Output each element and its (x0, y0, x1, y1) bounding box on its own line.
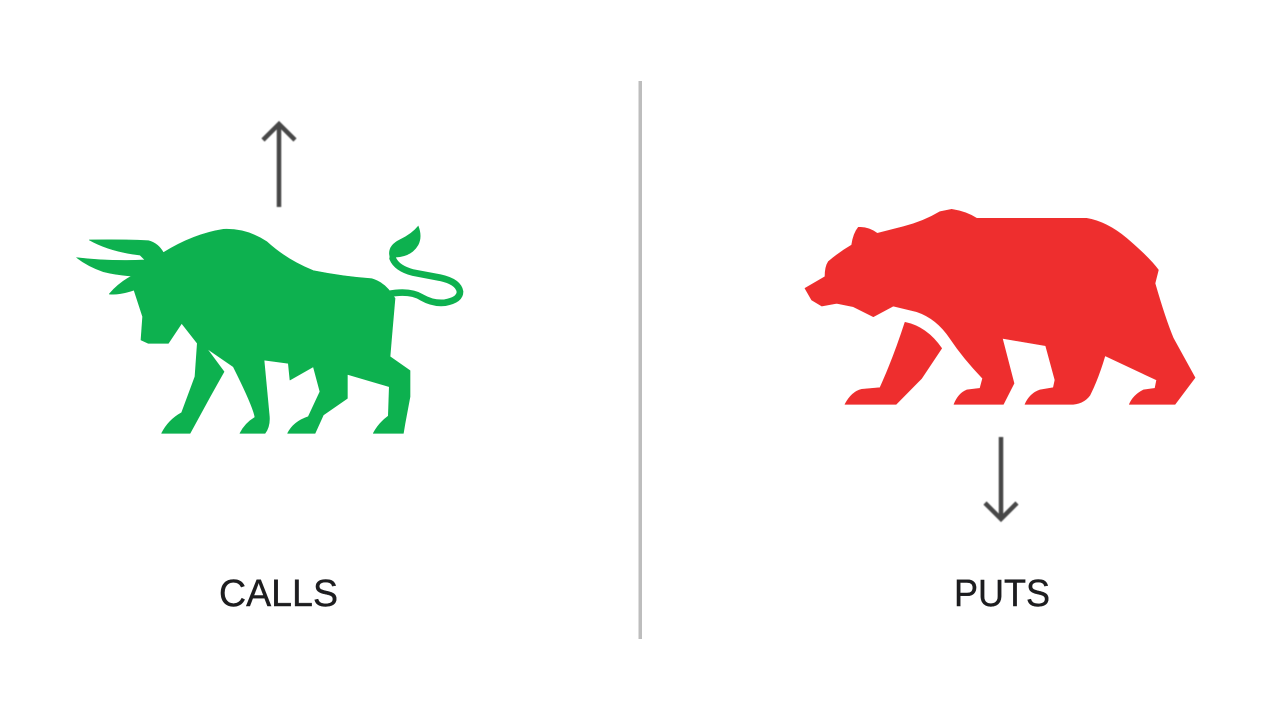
panel: calls (77, 124, 460, 615)
icon: down arrow (985, 437, 1017, 519)
icon: green bull (77, 226, 460, 433)
center divider (638, 81, 642, 639)
panel: puts (805, 209, 1195, 615)
icon: red bear (805, 209, 1195, 404)
label: puts: PUTS (954, 573, 1050, 615)
icon: up arrow (263, 124, 295, 207)
label: calls: CALLS (219, 573, 338, 615)
